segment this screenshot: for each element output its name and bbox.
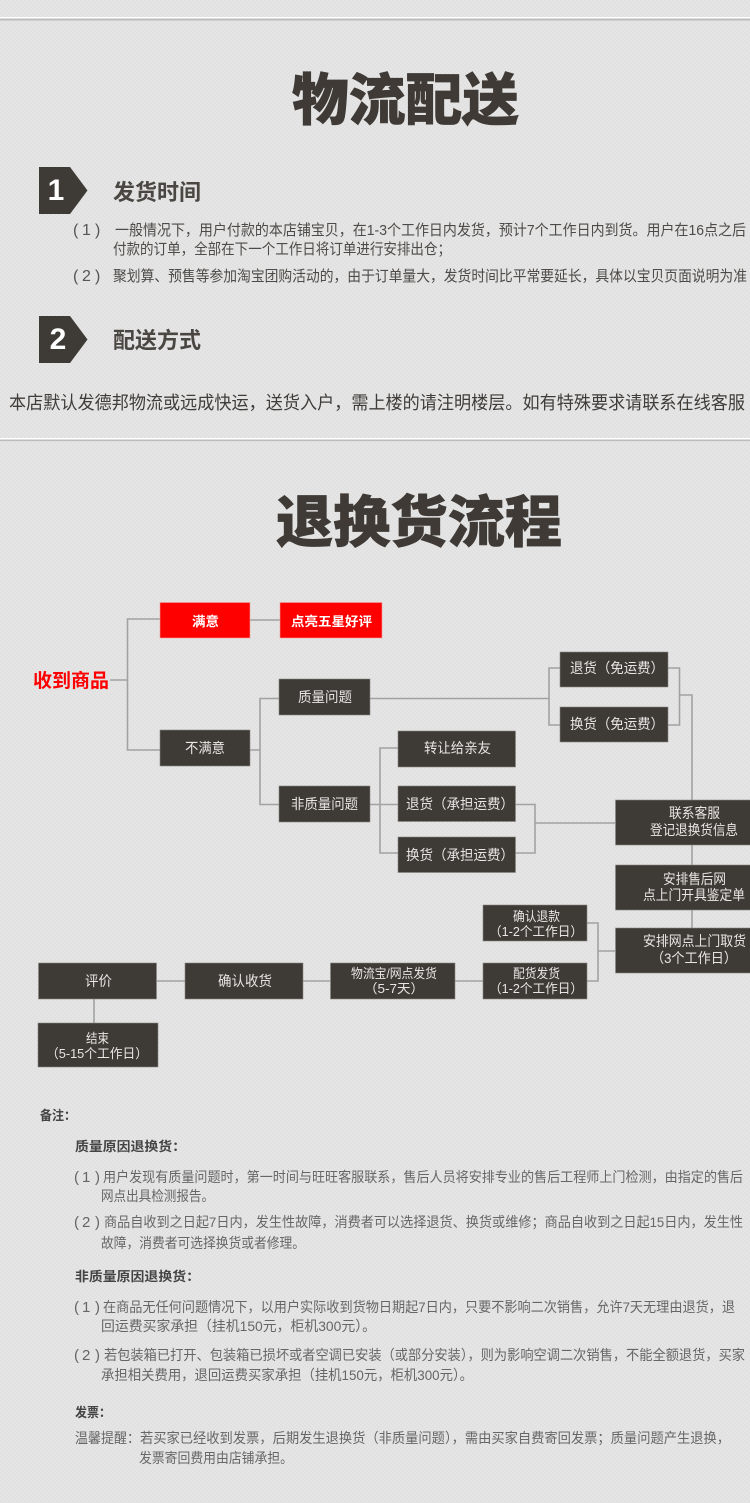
heading: non-quality returns: 非质量原因退换货： (75, 1269, 200, 1284)
text: quality note 1: ) (95, 1169, 100, 1186)
node: return buyer pays (398, 786, 516, 822)
text: shipping time rule 1 (73, 222, 746, 258)
node: logistics dispatch: （5-7天） (364, 981, 424, 996)
text: shipping time rule 2: 2 (82, 268, 91, 285)
node: dispatch: （1-2个工作日） (489, 981, 583, 996)
icon: badge 1 (39, 167, 88, 214)
node: confirm refund: 确认退款 (513, 909, 560, 924)
node: exchange free shipping: 换货（免运费） (570, 716, 664, 732)
node: non-quality problem (279, 786, 370, 822)
text: quality note 1: ( (74, 1169, 79, 1186)
text: shipping time rule 1: ( (73, 222, 79, 239)
text: quality note 2: ) (95, 1214, 100, 1231)
text: non-quality note 2: 承担相关费用，退回运费买家承担（挂机150元，柜机300元）。 (101, 1367, 473, 1383)
node: exchange buyer pays (398, 837, 516, 872)
node: exchange buyer pays: 换货（承担运费） (406, 847, 514, 863)
icon: badge 2 (39, 316, 88, 363)
node: satisfied: 满意 (192, 614, 219, 629)
title: logistics delivery: 物流配送 (292, 69, 519, 132)
node: satisfied (160, 602, 250, 638)
connector lines (94, 619, 692, 1023)
text: non-quality note 1: ) (95, 1299, 100, 1316)
flowchart: return process (33, 602, 750, 1067)
icon: badge 2: 2 (50, 323, 66, 356)
text: quality note 2: 2 (82, 1214, 90, 1231)
node: unsatisfied: 不满意 (185, 740, 225, 756)
node: after-sales inspection: 安排售后网 (663, 871, 726, 887)
text: non-quality note 1: 回运费买家承担（挂机150元，柜机300元）。 (101, 1318, 376, 1334)
node: confirm refund: （1-2个工作日） (489, 924, 583, 939)
node: dispatch (483, 963, 587, 999)
node: pickup: （3个工作日） (651, 950, 737, 966)
node: pickup (616, 928, 750, 973)
text: invoice reminder (75, 1430, 730, 1466)
node: end: 结束 (86, 1031, 109, 1046)
node: non-quality problem: 非质量问题 (291, 796, 358, 812)
text: quality note 1: 网点出具检测报告。 (101, 1188, 214, 1204)
node: dispatch: 配货发货 (513, 966, 560, 981)
icon: badge 1: 1 (48, 174, 64, 207)
text: non-quality note 1: ( (74, 1299, 79, 1316)
text: non-quality note 1 (74, 1299, 735, 1334)
node: return buyer pays: 退货（承担运费） (406, 796, 514, 812)
node: confirm receipt (185, 963, 303, 999)
node: confirm receipt: 确认收货 (218, 973, 272, 989)
text: quality note 2: 故障，消费者可选择换货或者修理。 (101, 1235, 305, 1251)
node: quality problem: 质量问题 (298, 689, 352, 705)
notes block (40, 1108, 745, 1466)
node: confirm refund (483, 905, 587, 941)
node: five star review: 点亮五星好评 (291, 614, 372, 629)
node: return free shipping (560, 652, 668, 687)
label: goods received: 收到商品 (33, 670, 109, 692)
node: transfer to friends: 转让给亲友 (424, 740, 491, 756)
node: end: （5-15个工作日） (46, 1046, 148, 1061)
heading: delivery method: 配送方式 (113, 328, 201, 353)
text: shipping time rule 1: ) (95, 222, 100, 239)
text: non-quality note 1: 1 (82, 1299, 90, 1316)
node: review (38, 963, 156, 999)
text: shipping time rule 2: ) (95, 268, 100, 285)
node: logistics dispatch (330, 963, 455, 999)
text: non-quality note 2: ( (74, 1347, 79, 1364)
text: non-quality note 2 (74, 1347, 745, 1383)
heading: quality returns: 质量原因退换货： (75, 1139, 186, 1154)
text: quality note 1: 1 (82, 1169, 90, 1186)
node: unsatisfied (160, 730, 250, 766)
node: logistics dispatch: 物流宝/网点发货 (351, 966, 437, 981)
node: five star review (280, 602, 382, 638)
text: invoice reminder: 发票寄回费用由店铺承担。 (139, 1450, 293, 1466)
text: quality note 2: ( (74, 1214, 79, 1231)
section 1: shipping time (39, 167, 747, 285)
node: contact customer service: 登记退换货信息 (650, 822, 738, 838)
heading: invoice: 发票： (75, 1405, 111, 1420)
node: review: 评价 (85, 973, 112, 989)
heading: shipping time: 发货时间 (113, 180, 201, 205)
node: contact customer service (616, 800, 750, 845)
text: shipping time rule 1: 1 (82, 222, 91, 239)
text: invoice reminder: 若买家已经收到发票，后期发生退换货（非质量问题），需由买家自费寄回发票；质量问题产生退换， (140, 1430, 730, 1447)
text: shipping time rule 1: 付款的订单，全部在下一个工作日将订单进行安排出仓； (113, 240, 451, 258)
text: non-quality note 2: ) (95, 1347, 100, 1364)
node: exchange free shipping (560, 707, 668, 742)
node: after-sales inspection (616, 865, 750, 910)
text: quality note 1 (74, 1169, 743, 1204)
node: transfer to friends (398, 731, 516, 767)
node: contact customer service: 联系客服 (669, 805, 720, 821)
text: non-quality note 2: 2 (82, 1347, 90, 1364)
text: quality note 2 (74, 1214, 743, 1251)
node: quality problem (279, 679, 370, 715)
title: return and exchange process: 退换货流程 (276, 491, 562, 554)
text: invoice reminder: 温馨提醒： (75, 1430, 140, 1446)
section 2: delivery method (9, 316, 745, 413)
heading: notes: 备注： (40, 1108, 76, 1123)
node: end (38, 1023, 158, 1067)
node: return free shipping: 退货（免运费） (570, 660, 664, 676)
text: shipping time rule 2: ( (73, 268, 79, 285)
